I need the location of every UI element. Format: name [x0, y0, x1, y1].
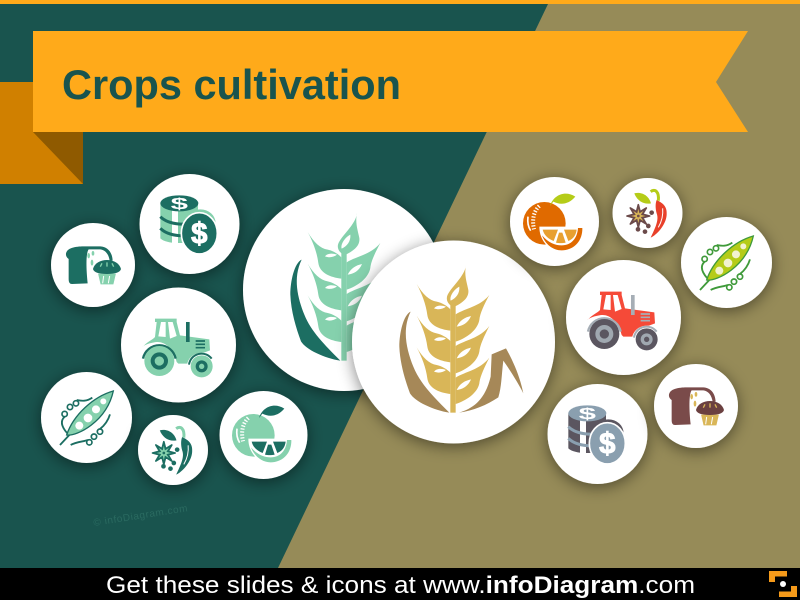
icon: mint orange: [232, 406, 293, 463]
small circle: colour bread: [654, 364, 738, 448]
title ribbon: [33, 31, 748, 132]
top accent bar: [0, 0, 800, 4]
icon: spices: [627, 190, 667, 238]
title: Crops cultivation: [62, 61, 401, 108]
logo: [769, 571, 797, 597]
small circle: mint peas: [41, 372, 132, 463]
icon: coins: [568, 405, 625, 464]
small circle: colour peas: [681, 217, 772, 308]
icon: gold wheat: [399, 265, 523, 413]
icon: mint wheat: [290, 213, 380, 361]
small circle: mint money: [140, 174, 240, 274]
icon: red tractor: [588, 292, 658, 350]
small circle: mint bread: [51, 223, 135, 307]
medium circle: mint tractor: [121, 288, 236, 402]
small circle: colour spices: [612, 178, 682, 248]
medium circle: colour tractor: [566, 260, 681, 375]
icon: orange: [523, 194, 584, 251]
icon: mint bread and muffin: [66, 246, 121, 285]
icon: mint coins: $: [171, 196, 188, 213]
large circle: mint wheat: [243, 189, 445, 391]
footer bar: [0, 568, 800, 600]
background: olive panel: [278, 4, 800, 568]
small circle: colour money: [548, 384, 648, 484]
icon: mint coins: [160, 195, 217, 254]
icon: bread and muffin: [669, 387, 724, 426]
footer text: Get these slides & icons at www. infoDiagram .com: [106, 572, 695, 599]
large circle: gold wheat: [352, 240, 555, 444]
icon: coins: $: [599, 428, 615, 461]
icon: mint pea pod: [60, 391, 113, 445]
icon: pea pod: [700, 236, 753, 290]
icon: mint tractor: [143, 319, 213, 377]
small circle: mint spices: [138, 415, 208, 485]
icon: mint coins: $: [191, 218, 207, 251]
icon: coins: $: [579, 406, 596, 423]
ribbon fold: [0, 82, 83, 184]
small circle: colour orange: [510, 177, 599, 266]
icon: mint spices: [152, 427, 192, 475]
small circle: mint orange: [220, 391, 308, 479]
watermark: © infoDiagram.com: [93, 503, 188, 529]
